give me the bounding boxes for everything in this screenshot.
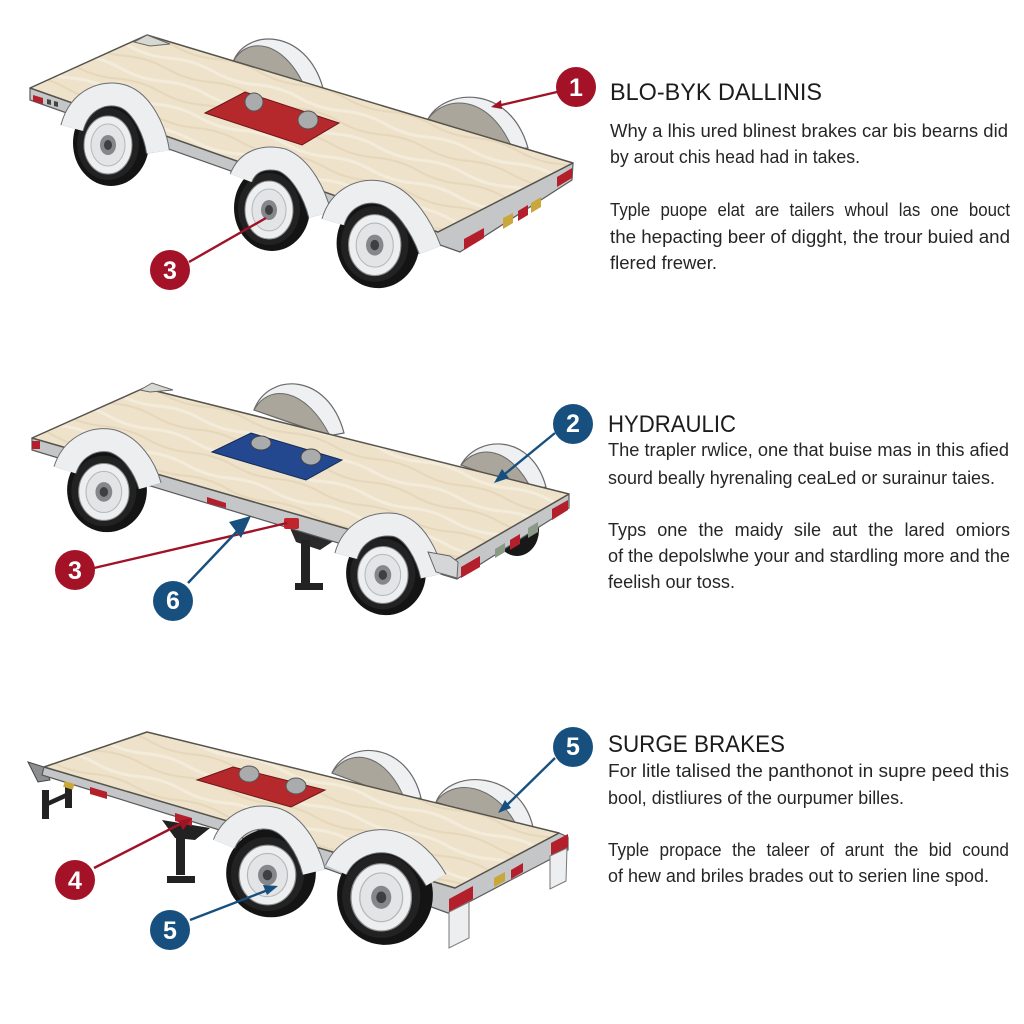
arrow to deck, callout 2 <box>494 433 555 483</box>
badge 3 <box>150 250 190 290</box>
badge 5 top <box>553 727 593 767</box>
heading 1: BLO-BYK DALLINIS <box>610 79 822 106</box>
panel: trailer 1 illustration <box>30 35 596 290</box>
badge 5 bottom: 5 <box>163 917 177 945</box>
near wheels and fenders <box>65 440 458 615</box>
badge 2: 2 <box>566 410 580 438</box>
badge 4 <box>55 860 95 900</box>
paragraph 3b: of hew and briles brades out to serien line spod. <box>608 866 989 886</box>
paragraph 2b: feelish our toss. <box>608 572 735 592</box>
badge 6 <box>153 581 193 621</box>
blue brake plate <box>212 433 342 480</box>
badge 2 <box>553 404 593 444</box>
badge 3: 3 <box>163 257 177 285</box>
badge 4: 4 <box>68 867 82 895</box>
arrow to fender, callout 5 <box>498 758 555 813</box>
paragraph 1b: the hepacting beer of digght, the trour buied and <box>610 227 1010 247</box>
badge 1 <box>556 67 596 107</box>
arrow to wheel, callout 5 <box>190 885 278 920</box>
heading 2: HYDRAULIC <box>608 411 736 438</box>
heading 3: SURGE BRAKES <box>608 731 785 758</box>
badge 5 bottom <box>150 910 190 950</box>
hitch on deck tip <box>140 383 173 392</box>
rail and mudflaps <box>42 767 568 948</box>
panel: trailer 3 illustration <box>28 727 593 950</box>
badge 6: 6 <box>166 587 180 615</box>
paragraph 2a <box>608 440 1009 488</box>
far fenders <box>332 751 533 828</box>
paragraph 1b: flered frewer. <box>610 253 717 273</box>
paragraph 1a: Why a lhis ured blinest brakes car bis bearns did <box>610 121 1008 141</box>
side rails <box>32 438 569 579</box>
text block: section 2 <box>608 411 1010 592</box>
red brake plate <box>197 766 325 807</box>
arrow to fender, callout 1 <box>491 92 557 109</box>
hitch plate on deck tip <box>134 35 170 46</box>
paragraph 1a <box>610 121 1008 167</box>
text block: section 1 <box>610 79 1010 273</box>
plywood deck <box>30 35 573 232</box>
plywood deck <box>44 732 559 888</box>
paragraph 2b: Typs one the maidy sile aut the lared omiors <box>608 520 1010 540</box>
paragraph 3a <box>608 761 1009 808</box>
side rails <box>30 88 573 252</box>
panel: trailer 2 illustration <box>32 383 593 621</box>
far fenders and rear wheel <box>254 384 546 556</box>
far fenders <box>233 39 528 150</box>
paragraph 1b <box>610 200 1010 273</box>
paragraph 2b <box>608 520 1010 592</box>
near wheels and fenders <box>224 817 436 945</box>
text block: section 3 <box>608 731 1009 886</box>
paragraph 2a: sourd beally hyrenaling ceaLed or surainur taies. <box>608 468 995 488</box>
paragraph 3a: For litle talised the panthonot in supre peed this <box>608 761 1009 781</box>
badge 3 <box>55 550 95 590</box>
landing jack <box>290 528 335 590</box>
blue arrow, callout 6 <box>188 516 251 583</box>
arrow, callout 4 <box>94 818 192 868</box>
paragraph 1a: by arout chis head had in takes. <box>610 147 860 167</box>
paragraph 3a: bool, distliures of the ourpumer billes. <box>608 788 904 808</box>
badge 1: 1 <box>569 74 583 102</box>
landing jack <box>162 820 210 883</box>
paragraph 2a: The trapler rwlice, one that buise mas in this afied <box>608 440 1009 460</box>
near wheels and fenders <box>72 95 430 288</box>
arrow to wheel, callout 3 <box>189 218 266 262</box>
red arrow, callout 3 <box>94 523 287 568</box>
badge 5 top: 5 <box>566 733 580 761</box>
paragraph 2b: of the depolslwhe your and stardling more and the <box>608 546 1010 566</box>
paragraph 3b <box>608 840 1009 886</box>
badge 3: 3 <box>68 557 82 585</box>
red brake plate <box>205 92 339 145</box>
tongue stands and hitch <box>28 762 72 819</box>
plywood deck <box>32 388 569 560</box>
paragraph 3b: Typle propace the taleer of arunt the bid cound <box>608 840 1009 860</box>
